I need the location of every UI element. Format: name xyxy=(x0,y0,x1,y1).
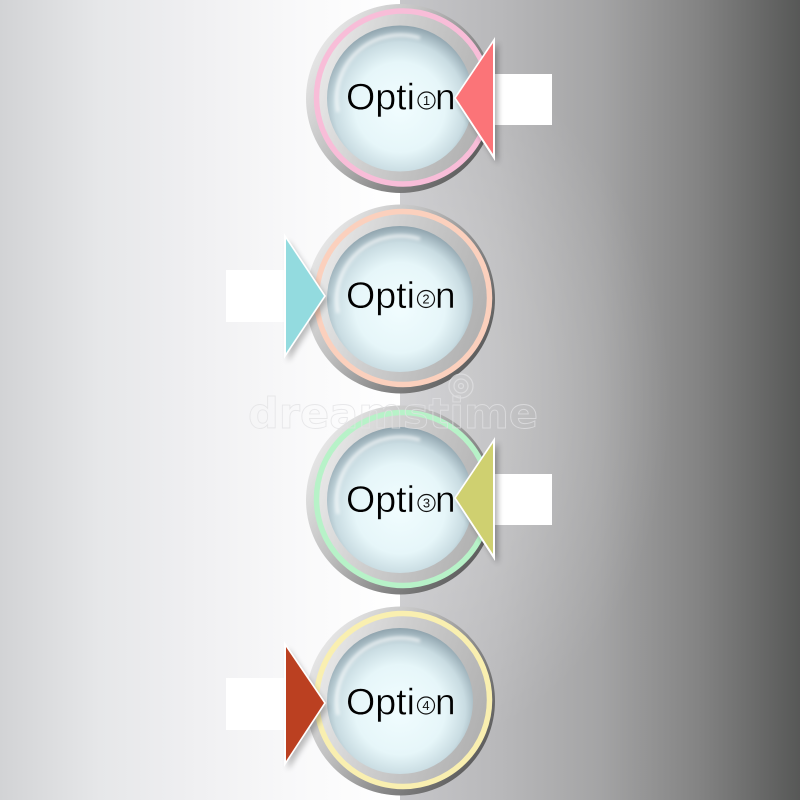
text: Option 1: 1 xyxy=(423,93,430,108)
label: white box 3 xyxy=(495,474,552,525)
text: Option 1 xyxy=(346,76,456,118)
text: Option 1: n xyxy=(435,76,456,118)
option 2 xyxy=(226,204,495,394)
arrow: rust pointer xyxy=(284,641,328,770)
text: Option 4: Opti xyxy=(346,682,415,722)
text: Option 4 xyxy=(346,682,456,722)
label: white box 1 xyxy=(495,74,552,125)
text: Option 4: n xyxy=(435,682,456,722)
text: Option 2: n xyxy=(435,275,456,316)
arrow: coral pointer xyxy=(454,37,498,164)
circle: option 3 disc xyxy=(306,406,495,594)
arrow: teal pointer xyxy=(284,233,328,362)
arrow: olive pointer xyxy=(454,437,498,564)
text: Option 4: 4 xyxy=(422,698,430,713)
text: Option 1: Opti xyxy=(346,76,415,118)
background: right dark panel xyxy=(400,0,800,800)
text: Option 2: Opti xyxy=(346,275,415,316)
watermark: dreamstime xyxy=(248,389,538,438)
option 4 xyxy=(226,606,495,796)
background: left light panel xyxy=(0,0,400,800)
text: Option 3: Opti xyxy=(346,479,415,520)
label: white box 4 xyxy=(226,678,285,730)
text: Option 2 xyxy=(346,275,456,316)
label: white box 2 xyxy=(226,270,285,322)
option 1 xyxy=(306,4,552,193)
text: Option 3 xyxy=(346,479,456,520)
text: Option 3: n xyxy=(435,479,456,520)
text: Option 3: 3 xyxy=(423,496,430,511)
option 3 xyxy=(306,406,552,594)
circle: option 2 disc xyxy=(306,204,495,394)
circle: option 4 disc xyxy=(306,606,495,796)
text: Option 2: 2 xyxy=(422,292,430,307)
circle: option 1 disc xyxy=(306,4,495,193)
